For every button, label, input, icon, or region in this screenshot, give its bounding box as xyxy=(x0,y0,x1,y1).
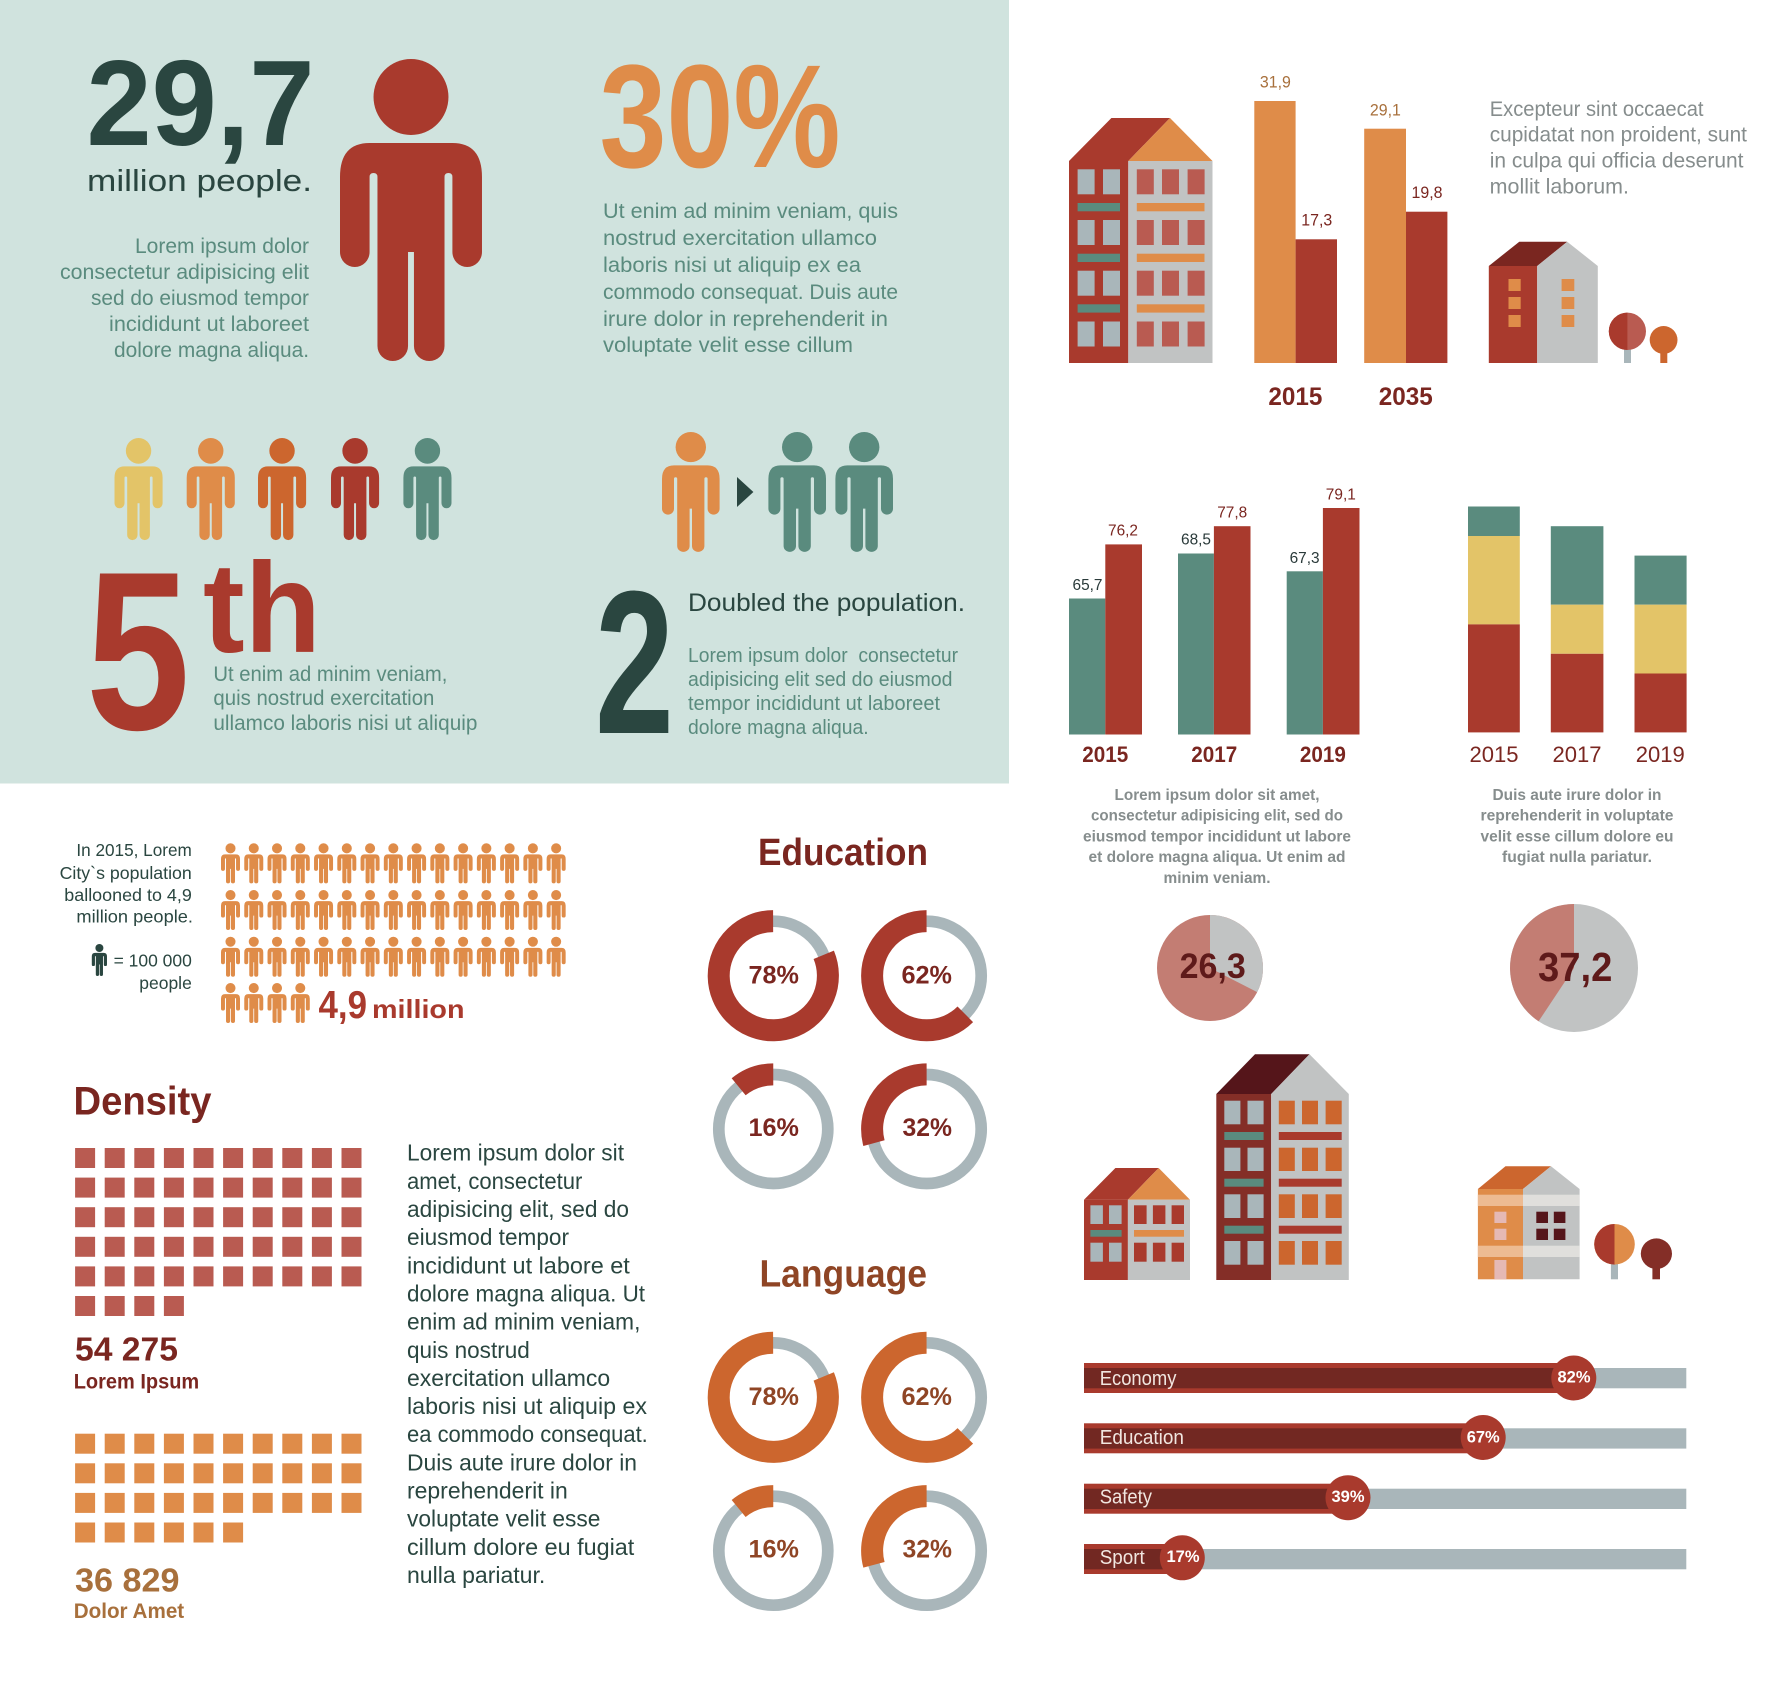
text block: stacked chart caption xyxy=(1480,787,1674,866)
progress bar: safety: 39% xyxy=(1332,1488,1365,1506)
legend: one icon equals 100 000 people xyxy=(92,944,192,993)
text block: 5th description: Ut enim ad minim veniam, xyxy=(213,663,447,686)
pictogram: 49 orange people xyxy=(221,843,566,1023)
donut: language 32%: 32% xyxy=(902,1536,952,1564)
pie chart: 26,3: 26,3 xyxy=(1180,947,1246,986)
panel: population background xyxy=(0,0,1009,784)
bar chart: grouped 2015 2017 2019: 77,8 xyxy=(1217,504,1247,522)
text block: population note: City`s population xyxy=(60,863,192,883)
bar chart: grouped 2015 2017 2019 xyxy=(1069,486,1360,767)
text block: doubled description: tempor incididunt ut laboreet xyxy=(688,693,940,715)
stat: 54 275 lorem ipsum xyxy=(74,1331,199,1394)
legend: one icon equals 100 000 people: = 100 000 xyxy=(114,951,192,971)
donut: education 32% xyxy=(860,1062,994,1196)
illustration: small house with trees xyxy=(1489,242,1678,363)
text block: excepteur: cupidatat non proident, sunt xyxy=(1490,124,1747,147)
stat: 36 829 dolor amet: 36 829 xyxy=(75,1562,180,1598)
stat: 36 829 dolor amet: Dolor Amet xyxy=(74,1600,184,1623)
bar chart: grouped 2015 2017 2019: 68,5 xyxy=(1181,532,1211,549)
text block: 5th description xyxy=(213,663,477,735)
donut: language 78% xyxy=(702,1326,845,1469)
text block: 30% description: voluptate velit esse cillum xyxy=(603,333,853,357)
donut: education 16%: 16% xyxy=(748,1114,799,1142)
stat: 54 275 lorem ipsum: Lorem Ipsum xyxy=(74,1370,199,1394)
text block: grouped chart caption: eiusmod tempor incididunt ut labore xyxy=(1083,828,1351,846)
stat: 29,7 million people: million people. xyxy=(87,163,312,198)
text block: density body copy: enim ad minim veniam, xyxy=(407,1309,640,1335)
text block: density body copy: Duis aute irure dolor in xyxy=(407,1449,637,1475)
text block: lorem ipsum right aligned: Lorem ipsum dolor xyxy=(135,235,309,258)
text block: 5th description: ullamco laboris nisi ut aliquip xyxy=(213,712,477,735)
donut: education 16% xyxy=(696,1052,850,1206)
legend: one icon equals 100 000 people: people xyxy=(139,973,192,993)
text block: stacked chart caption: reprehenderit in voluptate xyxy=(1480,808,1674,825)
text block: density body copy xyxy=(407,1140,648,1588)
progress bar: sport: Sport xyxy=(1100,1547,1145,1569)
bar chart: 2015 vs 2035: 2015 xyxy=(1268,383,1322,411)
text block: 30% description: Ut enim ad minim veniam, quis xyxy=(603,199,898,223)
bar chart: 2015 vs 2035: 31,9 xyxy=(1260,74,1291,92)
pie chart: 26,3 xyxy=(1157,915,1263,1021)
bar chart: 2015 vs 2035: 2035 xyxy=(1379,383,1433,411)
progress bar: sport: 17% xyxy=(1166,1548,1200,1566)
donut: education 62% xyxy=(849,898,1004,1053)
donut: education 78% xyxy=(702,904,845,1047)
progress bar: sport xyxy=(1084,1535,1686,1580)
text block: density body copy: ea commodo consequat. xyxy=(407,1421,648,1447)
bar chart: grouped 2015 2017 2019: 2019 xyxy=(1300,742,1346,767)
text block: excepteur: in culpa qui officia deserunt xyxy=(1490,149,1744,172)
icons: five coloured people xyxy=(114,438,451,540)
bar chart: grouped 2015 2017 2019: 2017 xyxy=(1191,742,1237,767)
text block: density body copy: reprehenderit in xyxy=(407,1478,568,1504)
progress bar: education: Education xyxy=(1100,1427,1184,1449)
stat: 54 275 lorem ipsum: 54 275 xyxy=(75,1331,178,1368)
bar chart: stacked 2015 2017 2019: 2019 xyxy=(1636,742,1685,767)
stat: 5th: 5 xyxy=(86,524,190,777)
text block: doubled description: dolore magna aliqua. xyxy=(688,717,869,739)
donut: education 62%: 62% xyxy=(902,961,952,989)
text block: stacked chart caption: fugiat nulla pariatur. xyxy=(1502,849,1652,866)
donut: language 32% xyxy=(860,1484,994,1618)
text block: density body copy: dolore magna aliqua. Ut xyxy=(407,1280,646,1306)
bar chart: 2015 vs 2035: 29,1 xyxy=(1370,102,1401,120)
bar chart: stacked 2015 2017 2019 xyxy=(1468,506,1687,767)
progress bar: education: 67% xyxy=(1467,1428,1500,1446)
progress bar: economy xyxy=(1084,1356,1686,1400)
pie chart: 37,2 xyxy=(1510,904,1638,1032)
text block: density body copy: quis nostrud xyxy=(407,1337,530,1363)
heading: doubled the population: Doubled the population. xyxy=(688,589,965,617)
stat: 2: 2 xyxy=(595,549,674,777)
heading: education: Education xyxy=(758,832,928,874)
text block: density body copy: exercitation ullamco xyxy=(407,1365,610,1391)
text block: grouped chart caption: minim veniam. xyxy=(1164,870,1270,887)
text block: doubled description xyxy=(688,645,958,739)
illustration: tall building xyxy=(1069,118,1212,363)
text block: grouped chart caption xyxy=(1083,787,1351,887)
text block: lorem ipsum right aligned: consectetur adipisicing elit xyxy=(60,261,309,284)
stat: 5th: th xyxy=(203,537,321,680)
text block: grouped chart caption: consectetur adipisicing elit, sed do xyxy=(1091,808,1343,825)
donut: language 16%: 16% xyxy=(748,1536,799,1564)
text block: doubled description: adipisicing elit sed do eiusmod xyxy=(688,669,952,691)
bar chart: 2015 vs 2035: 17,3 xyxy=(1301,212,1332,230)
text block: excepteur: Excepteur sint occaecat xyxy=(1490,98,1704,121)
text block: 30% description: nostrud exercitation ullamco xyxy=(603,226,877,250)
stat: 30%: 30% xyxy=(600,35,840,199)
bar chart: grouped 2015 2017 2019: 65,7 xyxy=(1072,577,1103,594)
stat: 4,9 million: million xyxy=(372,994,464,1024)
text block: grouped chart caption: et dolore magna aliqua. Ut enim ad xyxy=(1088,849,1346,866)
progress bar: education xyxy=(1084,1415,1686,1460)
progress bar: safety: Safety xyxy=(1100,1487,1152,1509)
bar chart: 2015 vs 2035: 19,8 xyxy=(1412,184,1442,202)
text block: population note xyxy=(60,840,193,927)
text block: 30% description: irure dolor in reprehenderit in xyxy=(603,307,888,331)
text block: doubled description: Lorem ipsum dolor consectetur xyxy=(688,645,958,667)
donut: education 78%: 78% xyxy=(748,961,799,989)
text block: 5th description: quis nostrud exercitation xyxy=(213,687,434,710)
stat: 29,7 million people: 29,7 xyxy=(86,35,314,171)
text block: 30% description: laboris nisi ut aliquip ex ea xyxy=(603,253,861,277)
text block: stacked chart caption: velit esse cillum dolore eu xyxy=(1480,828,1674,846)
donut: language 62% xyxy=(849,1320,1004,1475)
pictogram: orange density squares xyxy=(75,1434,361,1542)
illustration: orange house with trees xyxy=(1478,1166,1672,1279)
text block: excepteur xyxy=(1490,98,1747,198)
illustration: two apartment buildings xyxy=(1084,1054,1349,1280)
bar chart: grouped 2015 2017 2019: 2015 xyxy=(1082,742,1128,767)
progress bar: economy: Economy xyxy=(1100,1368,1176,1390)
text block: density body copy: amet, consectetur xyxy=(407,1168,583,1194)
text block: lorem ipsum right aligned xyxy=(60,235,309,362)
text block: density body copy: voluptate velit esse xyxy=(407,1506,600,1532)
donut: language 16% xyxy=(696,1474,850,1628)
bar chart: grouped 2015 2017 2019: 79,1 xyxy=(1326,486,1356,503)
text block: 30% description: commodo consequat. Duis aute xyxy=(603,280,898,304)
text block: stacked chart caption: Duis aute irure dolor in xyxy=(1492,787,1662,804)
text block: density body copy: laboris nisi ut aliquip ex xyxy=(407,1393,648,1419)
icons: one person doubling to two xyxy=(662,432,893,552)
text block: population note: million people. xyxy=(76,907,193,927)
stat: 5th xyxy=(86,524,321,777)
progress bar: economy: 82% xyxy=(1558,1369,1591,1387)
text block: lorem ipsum right aligned: sed do eiusmod tempor xyxy=(91,287,309,310)
text block: density body copy: adipisicing elit, sed do xyxy=(407,1196,629,1222)
bar chart: stacked 2015 2017 2019: 2017 xyxy=(1552,742,1602,767)
pie chart: 37,2: 37,2 xyxy=(1538,944,1612,990)
donut: language 78%: 78% xyxy=(748,1383,799,1411)
donut: education 32%: 32% xyxy=(902,1114,952,1142)
pictogram: red density squares xyxy=(75,1148,361,1316)
bar chart: 2015 vs 2035 xyxy=(1254,74,1447,411)
heading: density: Density xyxy=(74,1079,212,1123)
stat: 4,9 million: 4,9 xyxy=(318,984,367,1027)
text block: density body copy: nulla pariatur. xyxy=(407,1562,545,1588)
progress bar: safety xyxy=(1084,1475,1686,1520)
text block: excepteur: mollit laborum. xyxy=(1490,175,1629,198)
text block: lorem ipsum right aligned: dolore magna aliqua. xyxy=(114,339,309,362)
text block: density body copy: cillum dolore eu fugiat xyxy=(407,1534,635,1560)
text block: lorem ipsum right aligned: incididunt ut laboreet xyxy=(109,313,309,336)
icon: large red person xyxy=(340,59,482,361)
text block: density body copy: Lorem ipsum dolor sit xyxy=(407,1140,625,1166)
heading: language: Language xyxy=(760,1254,927,1296)
stat: 4,9 million xyxy=(318,984,464,1027)
text block: population note: ballooned to 4,9 xyxy=(64,885,192,905)
text block: density body copy: incididunt ut labore et xyxy=(407,1252,630,1278)
text block: density body copy: eiusmod tempor xyxy=(407,1224,569,1250)
donut: language 62%: 62% xyxy=(902,1383,952,1411)
bar chart: grouped 2015 2017 2019: 67,3 xyxy=(1290,550,1320,567)
stat: 36 829 dolor amet xyxy=(74,1562,184,1623)
bar chart: grouped 2015 2017 2019: 76,2 xyxy=(1108,523,1138,540)
text block: 30% description xyxy=(603,199,898,357)
bar chart: stacked 2015 2017 2019: 2015 xyxy=(1470,742,1518,767)
text block: grouped chart caption: Lorem ipsum dolor sit amet, xyxy=(1114,787,1320,804)
text block: population note: In 2015, Lorem xyxy=(76,840,192,860)
